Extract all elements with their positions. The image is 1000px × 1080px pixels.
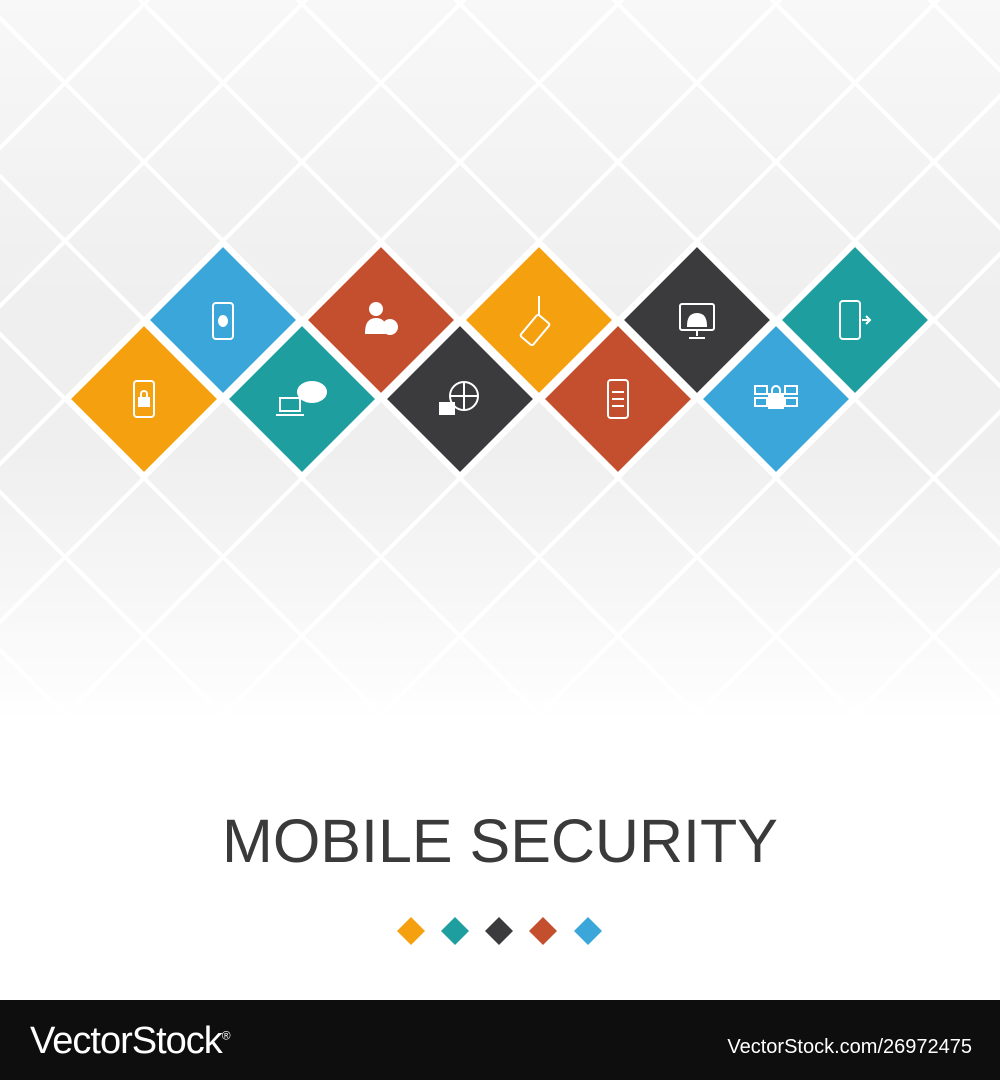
title: MOBILE SECURITY (222, 807, 778, 875)
icon: phone lock (134, 381, 154, 417)
icon: user lock (366, 303, 397, 334)
icon: phone bug (213, 303, 233, 339)
footer bar (0, 1000, 1000, 1080)
icon: phishing phone (520, 296, 550, 346)
icon: phone dollar (840, 301, 870, 339)
footer bar: VectorStock.com/26972475 (727, 1036, 972, 1058)
icon: globe lock (440, 382, 478, 414)
icon: phone list (608, 380, 628, 418)
footer bar: VectorStock® (30, 1020, 230, 1062)
icon: monitor hacker (680, 304, 714, 338)
icon: server lock (755, 386, 797, 408)
icon: laptop bug chat (276, 382, 326, 415)
